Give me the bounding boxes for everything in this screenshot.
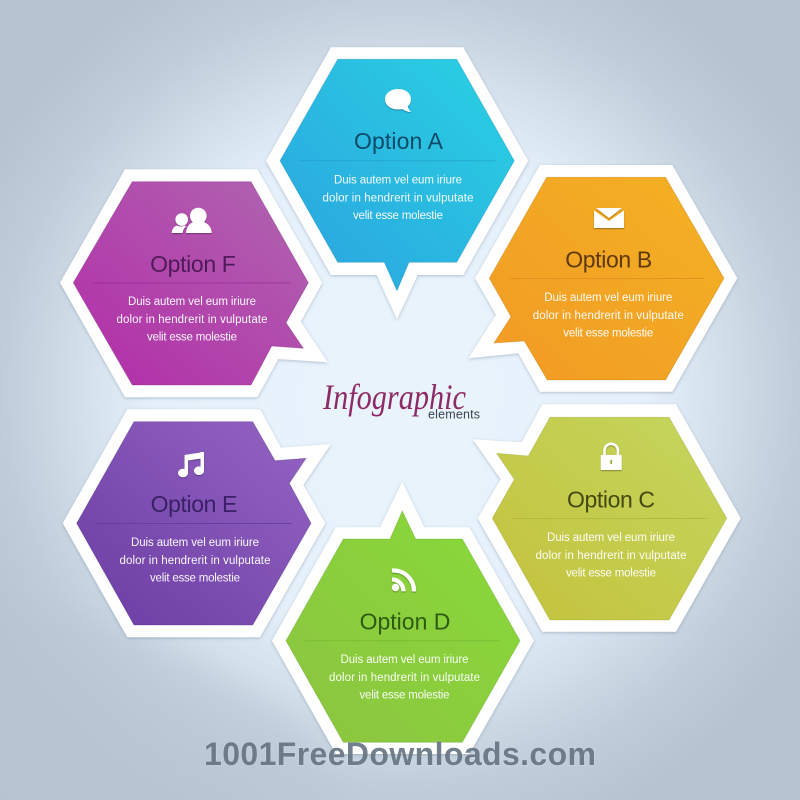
text: Option C description: dolor in hendrerit in vulputate [536, 550, 686, 562]
heading: Option E: Option E [151, 491, 237, 517]
heading: Option D: Option D [360, 608, 450, 634]
text: Option C description: velit esse molestie [566, 568, 656, 580]
text: Option D description: Duis autem vel eum iriure [340, 654, 468, 666]
icon: music note [178, 452, 204, 477]
panel: Option E [63, 409, 331, 637]
panel: Option F [60, 169, 328, 397]
icon: people [172, 208, 212, 233]
text: Option E description: dolor in hendrerit in vulputate [120, 555, 270, 567]
panel: Option B [468, 165, 737, 392]
icon: RSS [392, 570, 414, 592]
icon: speech bubble [385, 89, 411, 112]
panel: Option D [272, 482, 534, 754]
text: Option F description: velit esse molestie [147, 332, 237, 344]
heading: Option A: Option A [354, 128, 444, 154]
heading: Option C: Option C [567, 486, 655, 512]
panel: Option A [266, 47, 528, 319]
text: Option C description: Duis autem vel eum iriure [547, 532, 675, 544]
text: Option A description: Duis autem vel eum iriure [334, 174, 462, 186]
text: Option D description: velit esse molestie [360, 690, 450, 702]
heading: Option B: Option B [565, 246, 652, 272]
title: Infographic elements: Infographic [322, 377, 466, 417]
text: Option B description: Duis autem vel eum iriure [544, 292, 672, 304]
text: Option E description: velit esse molestie [150, 573, 240, 585]
text: Option B description: velit esse molestie [563, 328, 653, 340]
text: Option F description: dolor in hendrerit in vulputate [116, 314, 268, 326]
icon: envelope [594, 208, 624, 228]
watermark: 1001FreeDownloads.com [204, 736, 596, 772]
text: Option A description: velit esse molestie [353, 210, 443, 222]
text: Option F description: Duis autem vel eum iriure [128, 296, 256, 308]
title: Infographic elements: elements [428, 408, 480, 422]
lower background shade [0, 600, 340, 800]
text: Option D description: dolor in hendrerit in vulputate [329, 672, 480, 684]
text: Option A description: dolor in hendrerit in vulputate [322, 192, 474, 204]
text: Option B description: dolor in hendrerit in vulputate [533, 310, 684, 322]
central light area [300, 270, 500, 540]
heading: Option F: Option F [150, 251, 236, 277]
panel: Option C [473, 404, 741, 632]
text: Option E description: Duis autem vel eum iriure [131, 537, 259, 549]
icon: padlock [601, 444, 622, 470]
